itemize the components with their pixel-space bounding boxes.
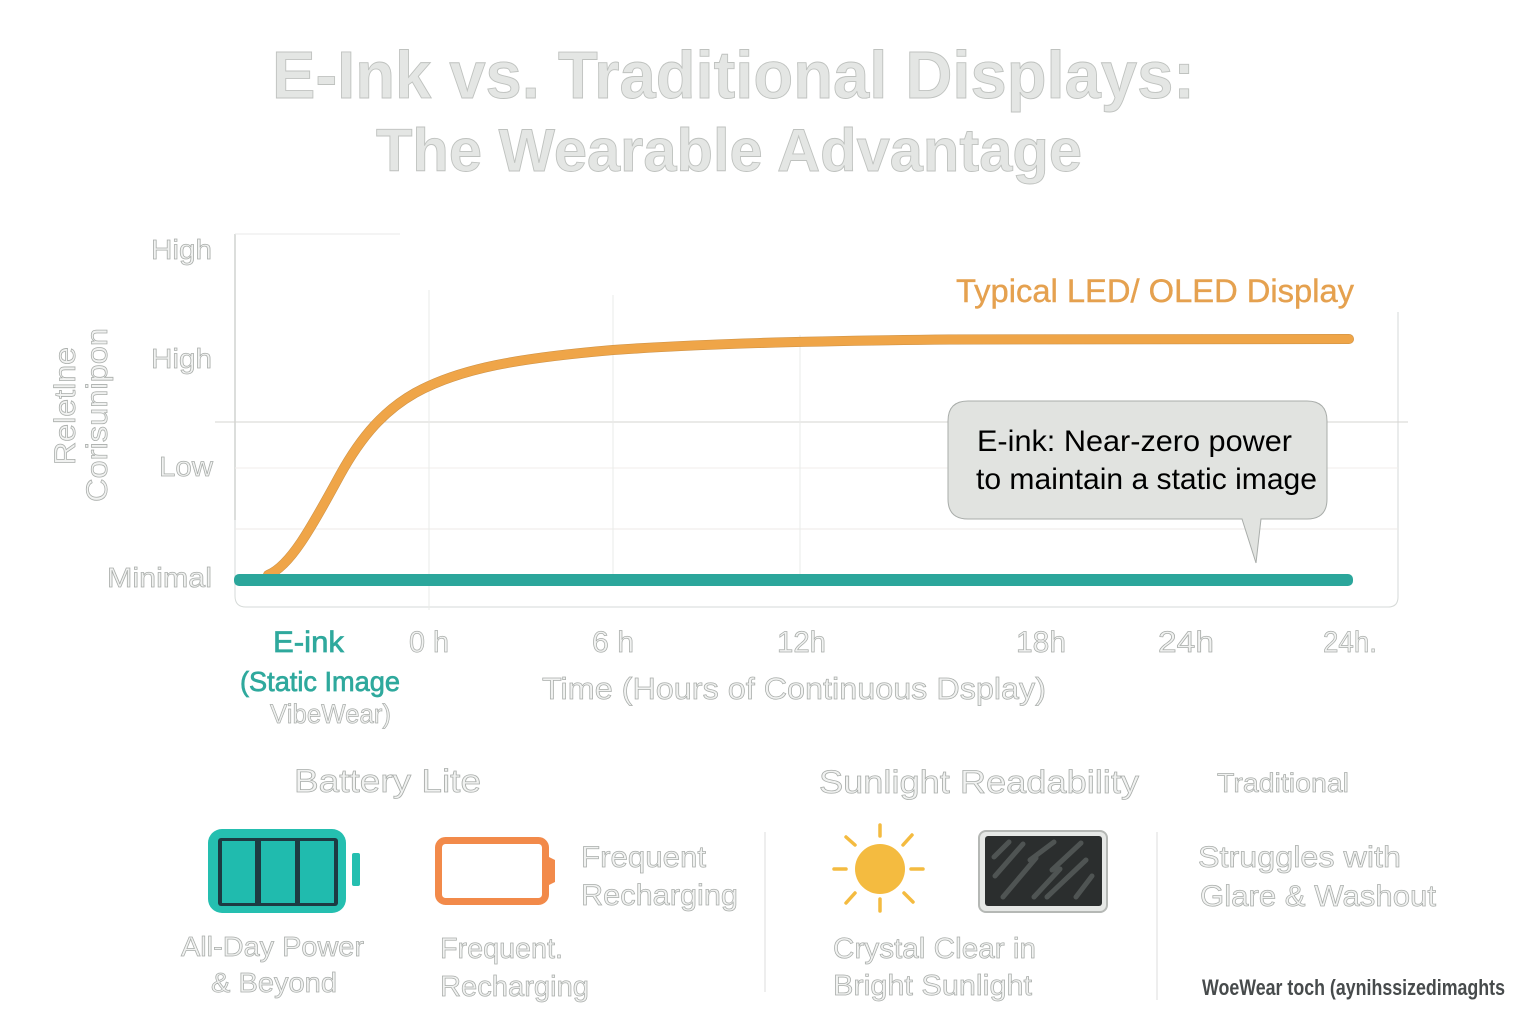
battery heading: Battery Lite: [294, 763, 481, 799]
orange LED/OLED curve: [268, 339, 1349, 575]
icon: sun: [834, 825, 923, 911]
sunlight heading: Sunlight Readability: [819, 764, 1139, 800]
x axis tick labels: 24h.: [1323, 626, 1377, 659]
title: E-Ink vs. Traditional Displays:: [272, 38, 1195, 113]
orange battery caption: Frequent.: [440, 933, 563, 965]
x axis tick labels: 24h: [1158, 626, 1214, 659]
x axis title: Time (Hours of Continuous Dsplay): [542, 671, 1046, 706]
teal battery caption: [181, 931, 364, 998]
e-ink series label: [240, 626, 400, 729]
icon: e-ink display: [979, 831, 1107, 912]
icon: full teal battery: [208, 829, 360, 913]
traditional heading: Traditional: [1217, 768, 1349, 798]
orange battery side label: Frequent: [581, 841, 707, 874]
y axis labels: Minimal: [107, 562, 212, 593]
panel: traditional: [1198, 768, 1437, 913]
teal battery caption: All-Day Power: [181, 931, 364, 962]
callout: to maintain a static image: [976, 463, 1317, 496]
orange battery caption: Recharging: [440, 971, 589, 1003]
y axis labels: High: [151, 234, 212, 265]
orange battery caption: [440, 933, 589, 1003]
callout: [948, 401, 1327, 563]
x axis tick labels: [409, 626, 1377, 659]
orange battery side label: [581, 841, 738, 912]
teal e-ink line: [234, 574, 1353, 586]
x axis tick labels: 18h: [1016, 626, 1066, 659]
panel: sunlight readability: [819, 764, 1139, 1002]
orange series label: Typical LED/ OLED Display: [956, 273, 1354, 309]
y axis labels: High: [151, 343, 212, 374]
title: The Wearable Advantage: [376, 117, 1082, 184]
traditional caption: Struggles with: [1198, 841, 1401, 874]
x axis tick labels: 12h: [777, 626, 826, 659]
e-ink series label: VibeWear): [270, 699, 391, 729]
y axis title: Reletlne: [49, 347, 82, 465]
e-ink series label: (Static Image: [240, 666, 400, 697]
traditional caption: [1198, 841, 1437, 913]
orange curve core: [268, 339, 1349, 575]
title: [272, 38, 1195, 184]
sunlight caption: [833, 933, 1036, 1002]
teal battery caption: & Beyond: [211, 967, 337, 998]
sunlight caption: Crystal Clear in: [833, 933, 1036, 965]
e-ink series label: E-ink: [273, 626, 345, 659]
y axis title: Corisunipon: [81, 328, 114, 502]
callout: E-ink: Near-zero power: [977, 425, 1292, 458]
y axis labels: Low: [159, 451, 214, 482]
y axis title: [49, 328, 114, 502]
y axis labels: [107, 234, 214, 593]
sunlight caption: Bright Sunlight: [833, 970, 1032, 1002]
traditional caption: Glare & Washout: [1200, 880, 1437, 913]
x axis tick labels: 6 h: [592, 626, 634, 659]
icon: empty orange battery: [438, 840, 555, 902]
panel: battery life: [181, 763, 738, 1003]
x axis tick labels: 0 h: [409, 626, 449, 659]
panel: power consumption chart: [49, 234, 1408, 729]
orange battery side label: Recharging: [581, 879, 738, 912]
